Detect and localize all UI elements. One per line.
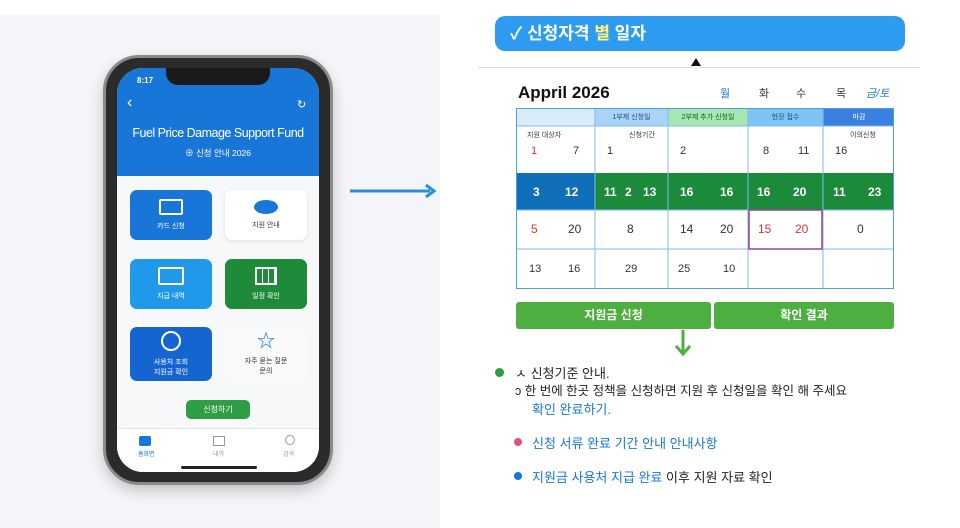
- phone screen: [117, 68, 319, 472]
- row 2: 13: [643, 185, 656, 199]
- row 2: 11: [833, 185, 846, 199]
- notes: [495, 366, 847, 485]
- grid lines: [517, 109, 893, 288]
- calendar: 0: [857, 222, 864, 236]
- nav bar: [117, 428, 319, 472]
- calendar: 20: [568, 222, 581, 236]
- green button: 신청하기: [203, 405, 233, 414]
- notes: 지원금 사용처 지급 완료 이후 지원 자료 확인: [532, 470, 773, 485]
- buttons: 지원금 신청: [584, 308, 643, 322]
- app header: 8:17: [137, 76, 153, 85]
- calendar: 신청기간: [629, 132, 655, 139]
- row 2: 23: [868, 185, 881, 199]
- arrow down: [675, 330, 691, 356]
- tiles: 카드 신청: [157, 223, 185, 230]
- phone screen: 지원금 확인: [154, 369, 188, 376]
- phone screen: 지급 내역: [157, 293, 185, 300]
- calendar: 1: [531, 145, 537, 157]
- app title: Fuel Price Damage Support Fund: [132, 126, 304, 140]
- weekday labels: 월: [720, 88, 730, 100]
- row 2: 2: [625, 185, 632, 199]
- notes: ㅅ 신청기준 안내.: [515, 366, 610, 381]
- row 2: 11: [604, 185, 617, 199]
- calendar: 7: [573, 145, 579, 157]
- row 2: [533, 185, 881, 199]
- arrow right: [350, 184, 436, 198]
- row 2: 12: [565, 185, 578, 199]
- phone screen: 자주 묻는 질문: [245, 358, 287, 365]
- weekday labels: 목: [836, 88, 846, 100]
- left panel background: [0, 15, 440, 528]
- header row: [517, 109, 595, 126]
- calendar: 25: [678, 263, 690, 275]
- calendar: 8: [763, 145, 769, 157]
- row 2: 16: [680, 185, 693, 199]
- text: 확인 결과: [780, 308, 828, 322]
- calendar: 20: [720, 222, 733, 236]
- notes: 확인 완료하기.: [532, 402, 611, 417]
- calendar: 10: [723, 263, 735, 275]
- buttons: [516, 302, 711, 329]
- app header: ↻: [297, 99, 306, 111]
- notes: ↄ 한 번에 한곳 정책을 신청하면 지원 후 신청일을 확인 해 주세요: [515, 384, 847, 398]
- month heading: Appril 2026: [518, 83, 610, 102]
- calendar: 현장 접수: [772, 114, 799, 121]
- calendar: [516, 108, 894, 289]
- calendar: 15: [758, 222, 771, 236]
- row 2: 16: [757, 185, 770, 199]
- calendar: 29: [625, 263, 637, 275]
- calendar: 16: [568, 263, 580, 275]
- title bar: [495, 16, 905, 51]
- green row: [517, 173, 595, 210]
- weekday labels: 금/토: [866, 88, 889, 100]
- tiles: [130, 190, 212, 240]
- calendar: 2: [680, 145, 686, 157]
- phone screen: 사용처 조회: [154, 359, 188, 366]
- app header: ‹: [127, 94, 132, 111]
- nav bar: 홈화면: [138, 452, 155, 458]
- row 1: 지원 대상자: [527, 132, 561, 139]
- divider: [478, 67, 920, 68]
- row 2: 16: [720, 185, 733, 199]
- app header: [117, 68, 319, 176]
- phone screen: 일정 확인: [252, 293, 280, 300]
- calendar: 이의신청: [850, 132, 876, 139]
- notes: 신청 서류 완료 기간 안내 안내사항: [532, 436, 718, 451]
- app header: ⊕ 신청 안내 2026: [185, 148, 251, 158]
- phone screen: 지원 안내: [252, 222, 280, 229]
- weekday labels: 수: [796, 88, 806, 100]
- notch: [166, 68, 270, 85]
- row 3: 5: [531, 222, 538, 236]
- phone screen: ☆: [257, 331, 275, 351]
- calendar: 마감: [853, 114, 865, 121]
- row 4: 13: [529, 263, 541, 275]
- nav bar: 내역: [213, 452, 224, 458]
- weekday labels: [720, 88, 890, 100]
- nav bar: 검색: [283, 452, 294, 458]
- pointer: [691, 58, 701, 66]
- calendar: 8: [627, 222, 634, 236]
- calendar: 11: [798, 145, 809, 157]
- calendar: 20: [795, 222, 808, 236]
- phone screen: 문의: [260, 368, 272, 375]
- calendar: 1: [607, 145, 613, 157]
- calendar: 1부제 신청일: [612, 114, 651, 121]
- calendar: 14: [680, 222, 693, 236]
- calendar: 2부제 추가 신청일: [682, 114, 734, 121]
- weekday labels: 화: [759, 88, 769, 100]
- row 2: 3: [533, 185, 540, 199]
- calendar: 16: [835, 145, 847, 157]
- green button: [186, 400, 250, 419]
- title bar: ✓ 신청자격 별 일자: [510, 24, 646, 43]
- row 2: 20: [793, 185, 806, 199]
- phone: [103, 55, 333, 485]
